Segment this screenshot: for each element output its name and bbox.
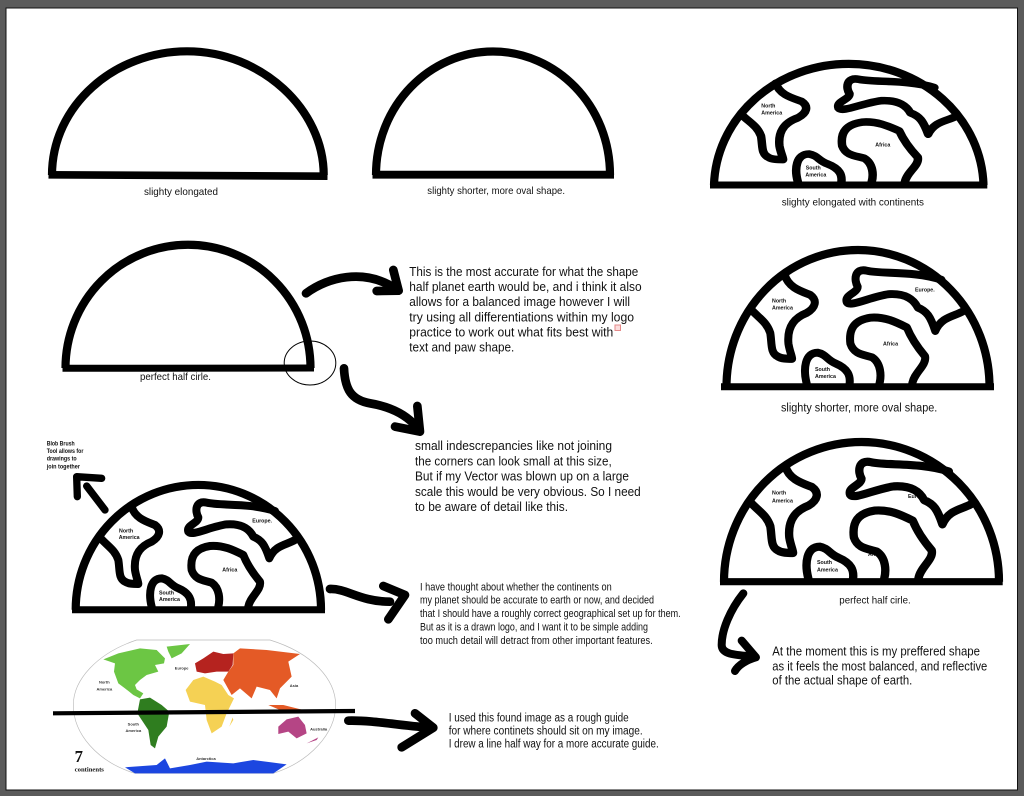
caption: slighty shorter: slighty shorter, more oval shape. [427, 185, 565, 197]
planet with continents: bottom left [72, 485, 325, 610]
text: accuracy note: half planet earth would be, and i think it also [409, 279, 642, 294]
planet with continents: bottom left: America [119, 535, 140, 541]
planet with continents: middle right: Africa [883, 341, 898, 347]
Asia [223, 648, 303, 710]
planet with continents: middle right: Europe. [915, 287, 935, 293]
South America [137, 698, 169, 748]
planet with continents: lower right: Africa [868, 552, 883, 558]
arrow: to blob brush note [77, 477, 105, 510]
text: found image note [449, 712, 659, 750]
caption: slighty elongated with continents: slighty elongated with continents [782, 197, 924, 209]
text: continents note: my planet should be accurate to earth or now, and decided [420, 595, 654, 607]
note: blob brush: Tool allows for [47, 448, 84, 455]
caption: slighty elongated: slighty elongated [144, 186, 218, 198]
planet with continents: middle right: America [772, 306, 793, 312]
arrow: to found image note [348, 713, 433, 747]
text: continents note: that I should have a roughly correct geographical set up for them. [420, 608, 681, 620]
text: accuracy note: practice to work out what fits best with [409, 324, 613, 339]
text: accuracy note: try using all differentiations within my logo [409, 309, 634, 324]
map labels [96, 666, 328, 761]
caption: perfect half cirle: perfect half cirle. [140, 371, 211, 383]
text: continents note: I have thought about whether the continents on [420, 581, 612, 593]
text: discrepancy note: small indescrepancies like not joining [415, 438, 612, 453]
map labels: America [96, 686, 113, 691]
planet with continents: middle right: South [815, 367, 830, 373]
planet with continents: lower right [720, 442, 1003, 582]
text: found image note: for where continets should sit on my image. [449, 726, 643, 738]
planet with continents: lower right: America [772, 499, 793, 505]
planet with continents: top right: America [805, 172, 826, 178]
7 continents label: continents [75, 767, 104, 774]
text: found image note: I used this found image as a rough guide [449, 712, 629, 724]
planet with continents: bottom left: America [159, 597, 180, 603]
text: continents note: too much detail will detract from other important features. [420, 635, 653, 647]
text: discrepancy note: scale this would be very obvious. So I need [415, 484, 641, 499]
planet with continents: top right [710, 64, 987, 185]
map labels: South [128, 721, 140, 726]
planet with continents: top right: Africa [875, 143, 890, 149]
planet with continents: bottom left: Africa [222, 567, 237, 573]
North America [103, 644, 190, 698]
map outline [73, 640, 336, 773]
Africa [186, 677, 234, 733]
7 continents label [75, 747, 104, 774]
planet with continents: middle right [721, 250, 994, 387]
arrow: to accuracy note [306, 270, 399, 293]
Antarctica [125, 758, 287, 773]
text: discrepancy note: to be aware of detail like this. [415, 499, 568, 514]
text: continents note: But as it is a drawn logo, and I want it to be simple adding [420, 622, 648, 634]
7 continents label: 7 [75, 747, 83, 766]
planet with continents: bottom left: Europe. [252, 518, 273, 524]
planet with continents: bottom left: North [119, 528, 133, 534]
text: discrepancy note: the corners can look small at this size, [415, 453, 612, 468]
text: discrepancy note [415, 438, 641, 514]
map labels: Europe [175, 666, 189, 671]
text: preferred shape note: as it feels the most balanced, and reflective [772, 658, 987, 673]
text: preferred shape note [772, 644, 987, 688]
text: accuracy note [409, 264, 642, 355]
planet with continents: lower right: North [772, 491, 786, 497]
halfway guide line [53, 711, 355, 713]
plain dome: perfect half circle [62, 245, 314, 368]
caption: slighty shorter with continents: slighty shorter, more oval shape. [781, 403, 937, 415]
planet with continents: bottom left: South [159, 591, 174, 597]
Europe [195, 652, 233, 673]
planet with continents: middle right: North [772, 298, 786, 304]
text: preferred shape note: At the moment this is my preffered shape [772, 644, 980, 659]
text: accuracy note: allows for a balanced image however I will [409, 294, 630, 309]
map labels: America [125, 728, 142, 733]
note: blob brush: Blob Brush [47, 440, 75, 448]
note: blob brush: join together [46, 463, 80, 470]
text: preferred shape note: of the actual shape of earth. [772, 673, 912, 688]
planet with continents: top right: North [761, 104, 775, 110]
continents outline [750, 462, 972, 578]
continents outline [741, 79, 957, 182]
note: blob brush: drawings to [47, 456, 77, 463]
icon: overset text marker [615, 325, 620, 330]
map labels: Australia [310, 727, 328, 732]
arrow: to discrepancy note [344, 368, 420, 432]
continents outline [101, 502, 295, 607]
caption: perfect half cirle lower right: perfect half cirle. [839, 594, 911, 606]
arrow: to preferred shape note [722, 593, 756, 671]
continents outline [751, 270, 963, 383]
text: accuracy note: text and paw shape. [409, 340, 514, 355]
text: found image note: I drew a line half way for a more accurate guide. [449, 738, 659, 750]
planet with continents: lower right: South [817, 560, 832, 566]
text: continents note [420, 581, 681, 647]
map labels: Asia [290, 683, 299, 688]
world map reference image [73, 640, 336, 774]
planet with continents: middle right: America [815, 374, 836, 380]
map labels: North [99, 680, 110, 685]
text: accuracy note: This is the most accurate for what the shape [409, 264, 638, 279]
text: discrepancy note: But if my Vector was blown up on a large [415, 469, 629, 484]
plain dome: slightly elongated [48, 51, 328, 176]
map labels: Antarctica [196, 756, 217, 761]
planet with continents: lower right: Europe. [908, 494, 928, 500]
note: blob brush [46, 440, 84, 470]
planet with continents: lower right: America [817, 568, 838, 574]
planet with continents: top right: South [806, 166, 821, 172]
plain dome: shorter oval [372, 52, 614, 175]
Australia [278, 717, 318, 743]
highlight circle on the corner [284, 341, 336, 385]
planet with continents: top right: America [761, 111, 782, 117]
arrow: to continents note [330, 586, 405, 619]
